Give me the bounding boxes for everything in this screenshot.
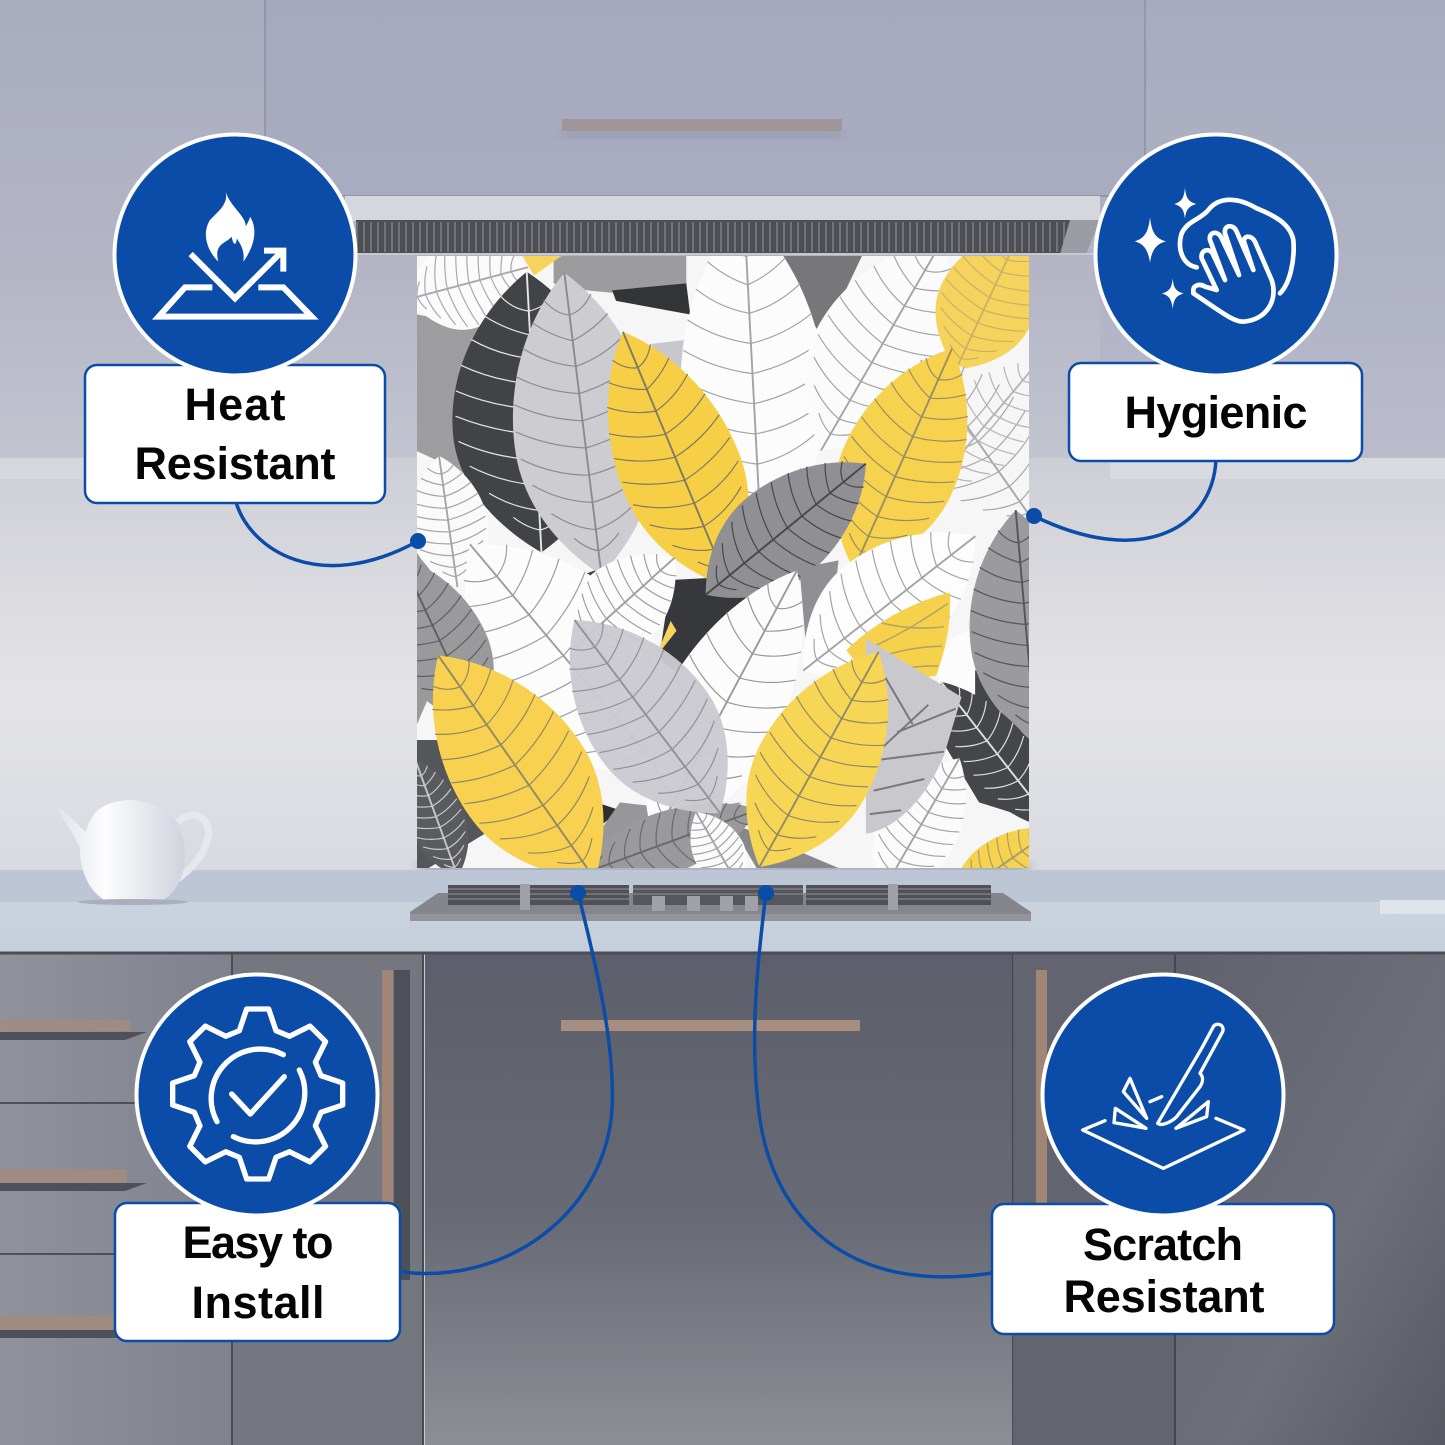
yellow leaf lower left (432, 655, 604, 868)
grey leaf tail (800, 560, 838, 639)
white leaf right middle (802, 532, 976, 672)
panel: leaf-pattern splashback (417, 256, 1029, 868)
icon: hand wiping with cloth (1135, 188, 1294, 322)
subheading: Install (192, 1277, 324, 1328)
white leaf lower left edge (417, 456, 486, 588)
grey leaf lower left (417, 564, 494, 706)
drawer and door handles (0, 970, 1047, 1338)
panel shadow (420, 862, 1028, 874)
label box (85, 365, 385, 503)
subheading: Resistant (134, 438, 336, 489)
white leaf top left (417, 256, 528, 330)
dark veined leaf bottom right (940, 681, 1029, 822)
white leaf mid left (464, 544, 596, 754)
lilac-grey leaf (512, 272, 639, 572)
callout: scratch resistant (992, 974, 1334, 1334)
grey leaf centre (706, 461, 866, 598)
upper cabinets (0, 0, 1445, 479)
cabinet handle (562, 119, 842, 138)
heading: Easy to (182, 1217, 334, 1268)
yellow leaf behind right (846, 592, 950, 685)
lilac leaf right (866, 638, 961, 834)
fine vein overlay right edge (958, 363, 1029, 482)
label box (115, 1203, 400, 1341)
yellow leaf lower right (746, 652, 888, 868)
yellow leaf centre (607, 332, 748, 578)
dark leaf bottom left corner (417, 762, 468, 868)
yellow leaf top right (936, 256, 1029, 368)
lower cabinets (0, 953, 1445, 1445)
callout: hygienic (1069, 134, 1362, 461)
white leaf bottom right (878, 758, 966, 868)
icon disc (1042, 974, 1284, 1216)
white leaf top right (804, 256, 951, 451)
extractor hood (345, 196, 1100, 255)
callout: heat resistant (85, 134, 385, 503)
gas hob (410, 884, 1031, 921)
yellow leaf bottom right corner (962, 828, 1029, 868)
wall (0, 479, 1445, 871)
white leaf behind lilac (578, 554, 676, 636)
icon disc (136, 974, 378, 1216)
connector: scratch resistant (755, 885, 992, 1277)
heading: Scratch (1083, 1219, 1243, 1270)
white leaf centre (646, 570, 804, 816)
heading: Heat (184, 379, 286, 430)
back grey and dark shapes (417, 256, 1029, 868)
white leaf bottom (690, 812, 746, 868)
grey leaf right edge (970, 510, 1029, 738)
connector: easy to install (402, 885, 612, 1273)
label box (992, 1204, 1334, 1334)
icon disc (114, 134, 356, 376)
callout: easy to install (115, 974, 400, 1341)
icon: knife scratching surface (1083, 1024, 1244, 1168)
dark leaf left (452, 272, 558, 552)
connector: hygienic (1026, 460, 1216, 540)
label box (1069, 363, 1362, 461)
heading: Hygienic (1124, 387, 1308, 438)
teapot (52, 800, 209, 905)
lilac leaf centre bottom (569, 620, 728, 814)
big white leaf top centre (681, 256, 816, 494)
fine white leaf right edge (920, 360, 1029, 516)
yellow leaf centre right (838, 348, 968, 562)
white patch right (963, 666, 976, 695)
worktop (0, 870, 1445, 954)
subheading: Resistant (1064, 1271, 1264, 1322)
icon disc (1096, 134, 1336, 376)
icon: gear with check mark (173, 1009, 343, 1179)
icon: flame over heated surface (159, 192, 312, 317)
grey leaf bottom centre (598, 802, 748, 868)
connector: heat resistant (236, 502, 426, 566)
